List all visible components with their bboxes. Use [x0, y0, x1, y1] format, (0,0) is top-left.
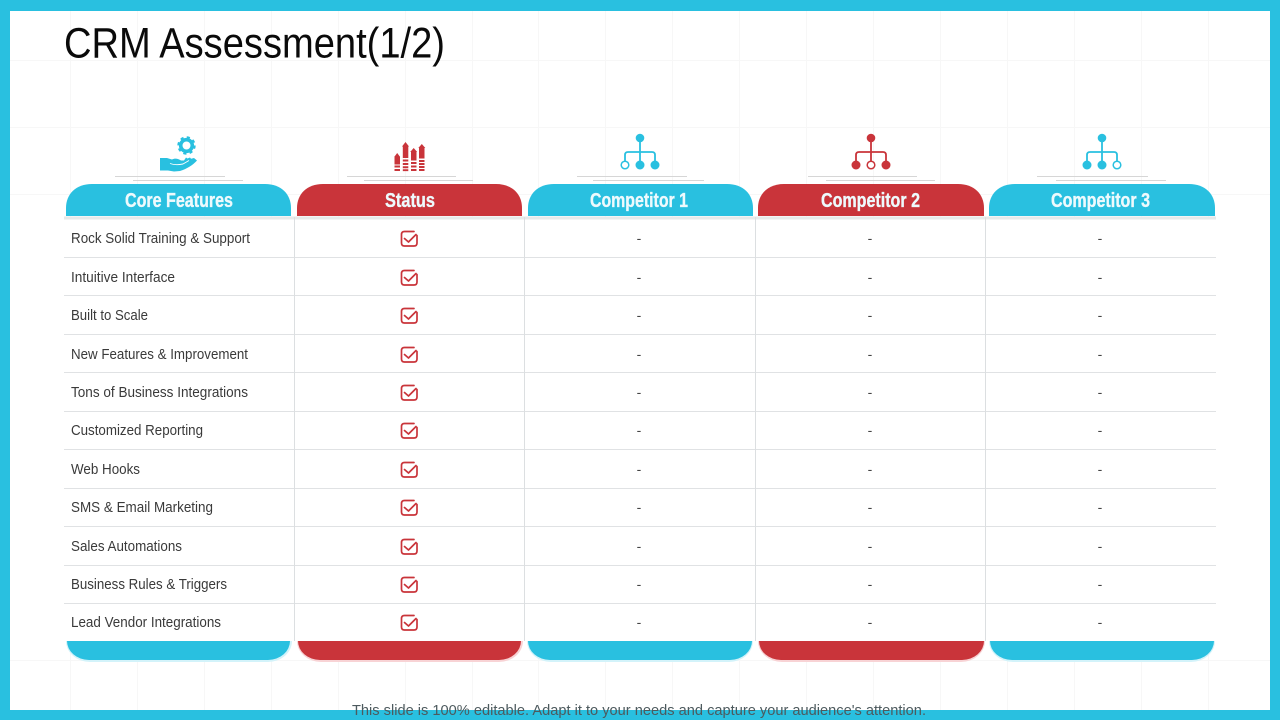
divider: competitor 1: [577, 176, 704, 180]
column icon: hand with gear: [160, 138, 197, 172]
row: SMS & Email Marketing: SMS & Email Marketing: [71, 499, 213, 516]
footer bars: [66, 641, 1215, 662]
row: Customized Reporting: -: [1098, 422, 1103, 438]
row: Built to Scale: -: [1098, 307, 1103, 323]
row: Sales Automations: -: [1098, 538, 1103, 554]
header: Competitor 1: [528, 184, 753, 216]
row: Web Hooks: [71, 461, 1103, 478]
row: Sales Automations: Sales Automations: [71, 538, 182, 555]
row: Web Hooks: -: [637, 461, 642, 477]
header: Status: [297, 184, 522, 216]
row: Lead Vendor Integrations: -: [1098, 614, 1103, 630]
divider: status: [347, 176, 473, 180]
divider: core features: [115, 176, 243, 180]
row: Sales Automations: [71, 538, 1103, 555]
divider: competitor 3: [1037, 176, 1166, 180]
row: Customized Reporting: -: [868, 422, 873, 438]
divider: competitor 2: [808, 176, 935, 180]
header: Competitor 3: Competitor 3: [1051, 190, 1150, 212]
row: Business Rules & Triggers: -: [637, 576, 642, 592]
row: Lead Vendor Integrations: Lead Vendor Integrations: [71, 614, 221, 631]
column icon: org chart 3: [1082, 134, 1121, 170]
row: Web Hooks: -: [1098, 461, 1103, 477]
header: Status: Status: [385, 190, 435, 212]
row: Customized Reporting: Customized Reporting: [71, 422, 203, 439]
row: Tons of Business Integrations: -: [1098, 384, 1103, 400]
title: CRM Assessment(1/2): [64, 20, 445, 68]
row: Business Rules & Triggers: -: [1098, 576, 1103, 592]
header: Core Features: [66, 184, 291, 216]
row: Lead Vendor Integrations: -: [868, 614, 873, 630]
table: [64, 134, 1216, 662]
row: New Features & Improvement: New Features & Improvement: [71, 346, 249, 363]
column icon: org chart 1: [621, 134, 660, 170]
row: Business Rules & Triggers: Business Rules & Triggers: [71, 576, 227, 593]
column icon: rising bars: [394, 142, 425, 171]
row: Intuitive Interface: [71, 269, 1103, 286]
row: Rock Solid Training & Support: -: [1098, 230, 1103, 246]
row: Rock Solid Training & Support: [71, 230, 1103, 247]
row: New Features & Improvement: -: [637, 346, 642, 362]
row: Built to Scale: -: [637, 307, 642, 323]
row: Rock Solid Training & Support: -: [637, 230, 642, 246]
row: Tons of Business Integrations: [71, 384, 1103, 401]
row: Built to Scale: -: [868, 307, 873, 323]
header: Core Features: Core Features: [125, 190, 233, 212]
row: Intuitive Interface: -: [868, 269, 873, 285]
header: Competitor 1: Competitor 1: [590, 190, 688, 212]
row: Intuitive Interface: -: [1098, 269, 1103, 285]
row: Customized Reporting: [71, 422, 1103, 439]
row: Web Hooks: -: [868, 461, 873, 477]
row: Built to Scale: Built to Scale: [71, 307, 148, 324]
row: Customized Reporting: -: [637, 422, 642, 438]
row: Intuitive Interface: -: [637, 269, 642, 285]
row: Web Hooks: Web Hooks: [71, 461, 140, 478]
row: Rock Solid Training & Support: -: [868, 230, 873, 246]
row: SMS & Email Marketing: -: [868, 499, 873, 515]
row: Lead Vendor Integrations: -: [637, 614, 642, 630]
row: SMS & Email Marketing: -: [1098, 499, 1103, 515]
row: Sales Automations: -: [637, 538, 642, 554]
row: Built to Scale: [71, 307, 1103, 324]
row: SMS & Email Marketing: [71, 499, 1103, 516]
row: New Features & Improvement: [71, 346, 1103, 363]
header: Competitor 2: Competitor 2: [821, 190, 920, 212]
row: Business Rules & Triggers: [71, 576, 1103, 593]
row: SMS & Email Marketing: -: [637, 499, 642, 515]
header: Competitor 3: [989, 184, 1215, 216]
row: New Features & Improvement: -: [868, 346, 873, 362]
row: Lead Vendor Integrations: [71, 614, 1103, 631]
row: Tons of Business Integrations: -: [637, 384, 642, 400]
row: Rock Solid Training & Support: Rock Solid Training & Support: [71, 230, 251, 247]
footer note: This slide is 100% editable. Adapt it to your needs and capture your audience's attention.: [352, 703, 926, 719]
row: Business Rules & Triggers: -: [868, 576, 873, 592]
row: Sales Automations: -: [868, 538, 873, 554]
row: Tons of Business Integrations: Tons of Business Integrations: [71, 384, 248, 401]
row: New Features & Improvement: -: [1098, 346, 1103, 362]
row: Tons of Business Integrations: -: [868, 384, 873, 400]
header: Competitor 2: [758, 184, 984, 216]
row: Intuitive Interface: Intuitive Interface: [71, 269, 175, 286]
column icon: org chart 2: [852, 134, 890, 170]
